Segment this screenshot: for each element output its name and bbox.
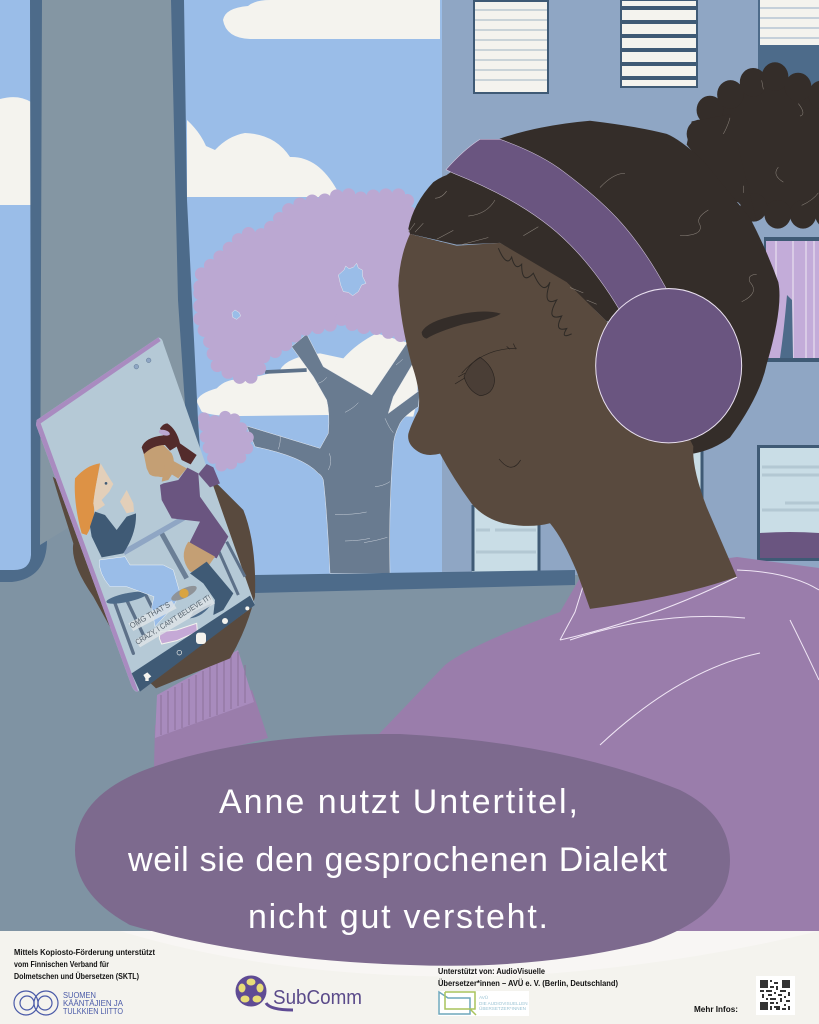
window with curtain [764, 237, 819, 362]
left woman top [90, 512, 136, 557]
window top right [758, 0, 819, 110]
tree, cloud and foliage [197, 193, 420, 573]
thin branch [265, 370, 307, 372]
left woman face [93, 463, 113, 512]
trunk lines [278, 359, 403, 543]
funding note left [14, 948, 155, 981]
AVÜ logo [438, 991, 529, 1016]
caption text: nicht gut versteht. [248, 898, 548, 936]
small foliage [204, 415, 248, 467]
left woman hair [75, 463, 100, 535]
left woman trousers [99, 557, 180, 627]
hair bun [687, 73, 819, 221]
large foliage [200, 193, 410, 380]
right stool [218, 542, 245, 595]
hair highlights [408, 80, 818, 304]
funding note left: Mittels Kopiosto-Förderung unterstützt [14, 948, 155, 957]
hand thumb [198, 464, 220, 487]
funding note right: Unterstützt von: AudioVisuelle [438, 967, 546, 976]
left woman hands [120, 490, 134, 513]
SKTL logo [14, 991, 124, 1016]
middle cloud [187, 120, 337, 197]
smile [499, 459, 521, 467]
AVÜ logo: AVÜ [479, 994, 488, 1000]
SKTL logo: SUOMEN [63, 991, 96, 1000]
hoodie fold lines [560, 570, 819, 745]
hair tie [158, 429, 170, 437]
right woman face [143, 445, 174, 477]
hand [53, 472, 255, 688]
phone body [36, 337, 255, 692]
middle window sky [180, 0, 445, 578]
face and neck [398, 234, 737, 609]
phone purple edge [36, 337, 161, 692]
lower cloud [197, 333, 418, 417]
small window behind head [690, 450, 703, 502]
building across the street [442, 0, 819, 575]
window lower blinds [472, 505, 540, 572]
right stool seat [190, 603, 212, 618]
front hair [408, 173, 620, 321]
left woman eye [105, 482, 107, 485]
more info label: Mehr Infos: [694, 1005, 738, 1014]
caption text: Anne nutzt Untertitel, [219, 783, 578, 821]
funding note left: vom Finnischen Verband für [14, 960, 109, 969]
tree trunk [247, 334, 420, 573]
caption text: weil sie den gesprochenen Dialekt [127, 841, 668, 879]
right woman hair [142, 423, 197, 464]
eyebrow [422, 312, 501, 339]
funding note right: Übersetzer*innen – AVÜ e. V. (Berlin, Deutschland) [438, 979, 618, 988]
headband [446, 139, 667, 311]
sleeve [154, 650, 268, 768]
phone and hand [36, 337, 255, 692]
subtitle text: OMG THAT'S [128, 600, 172, 630]
left window with sky and cloud [0, 0, 47, 582]
sideburn curls [498, 248, 572, 336]
SubComm logo [236, 976, 362, 1010]
girl hoodie [378, 557, 819, 931]
SKTL logo: KÄÄNTÄJIEN JA [63, 999, 124, 1008]
earmuff [596, 289, 742, 443]
AVÜ logo: DIE AUDIOVISUELLEN [479, 1001, 528, 1006]
foliage gaps [232, 263, 366, 319]
QR code [756, 976, 795, 1015]
funding note left: Dolmetschen und Übersetzen (SKTL) [14, 972, 139, 981]
SubComm logo: SubComm [273, 987, 362, 1009]
left woman shoe [159, 623, 197, 644]
caption blob shadow [120, 931, 819, 977]
AVÜ logo: ÜBERSETZER*INNEN [479, 1005, 526, 1011]
table [123, 512, 191, 578]
subtitle bubbles: CRAZY, I CAN'T BELIEVE IT! [134, 593, 212, 647]
right woman hand [162, 463, 173, 482]
right woman dress [160, 468, 228, 558]
phone bottom bar [132, 596, 255, 692]
left stool [115, 593, 152, 653]
window blinds top left [474, 1, 548, 93]
footer background [0, 931, 819, 1024]
back hair [447, 121, 779, 454]
right woman neck [170, 460, 187, 478]
caption text [127, 783, 668, 936]
right woman thigh [184, 542, 215, 573]
camera dots [134, 358, 151, 369]
left stool seat [106, 589, 148, 606]
window with table [757, 445, 819, 561]
phone nav icons [143, 606, 249, 681]
right woman boot [190, 562, 233, 615]
top cloud [223, 0, 440, 39]
train wall pillar [40, 0, 195, 545]
funding note right [438, 967, 618, 988]
window blinds top middle [621, 0, 697, 87]
SKTL logo: TULKKIEN LIITTO [63, 1007, 123, 1016]
lower window frame [255, 570, 575, 593]
head with hair, headband and earmuff [398, 73, 819, 609]
pillar window frame [171, 0, 202, 480]
eye [455, 344, 517, 396]
caption bubble [75, 734, 730, 966]
